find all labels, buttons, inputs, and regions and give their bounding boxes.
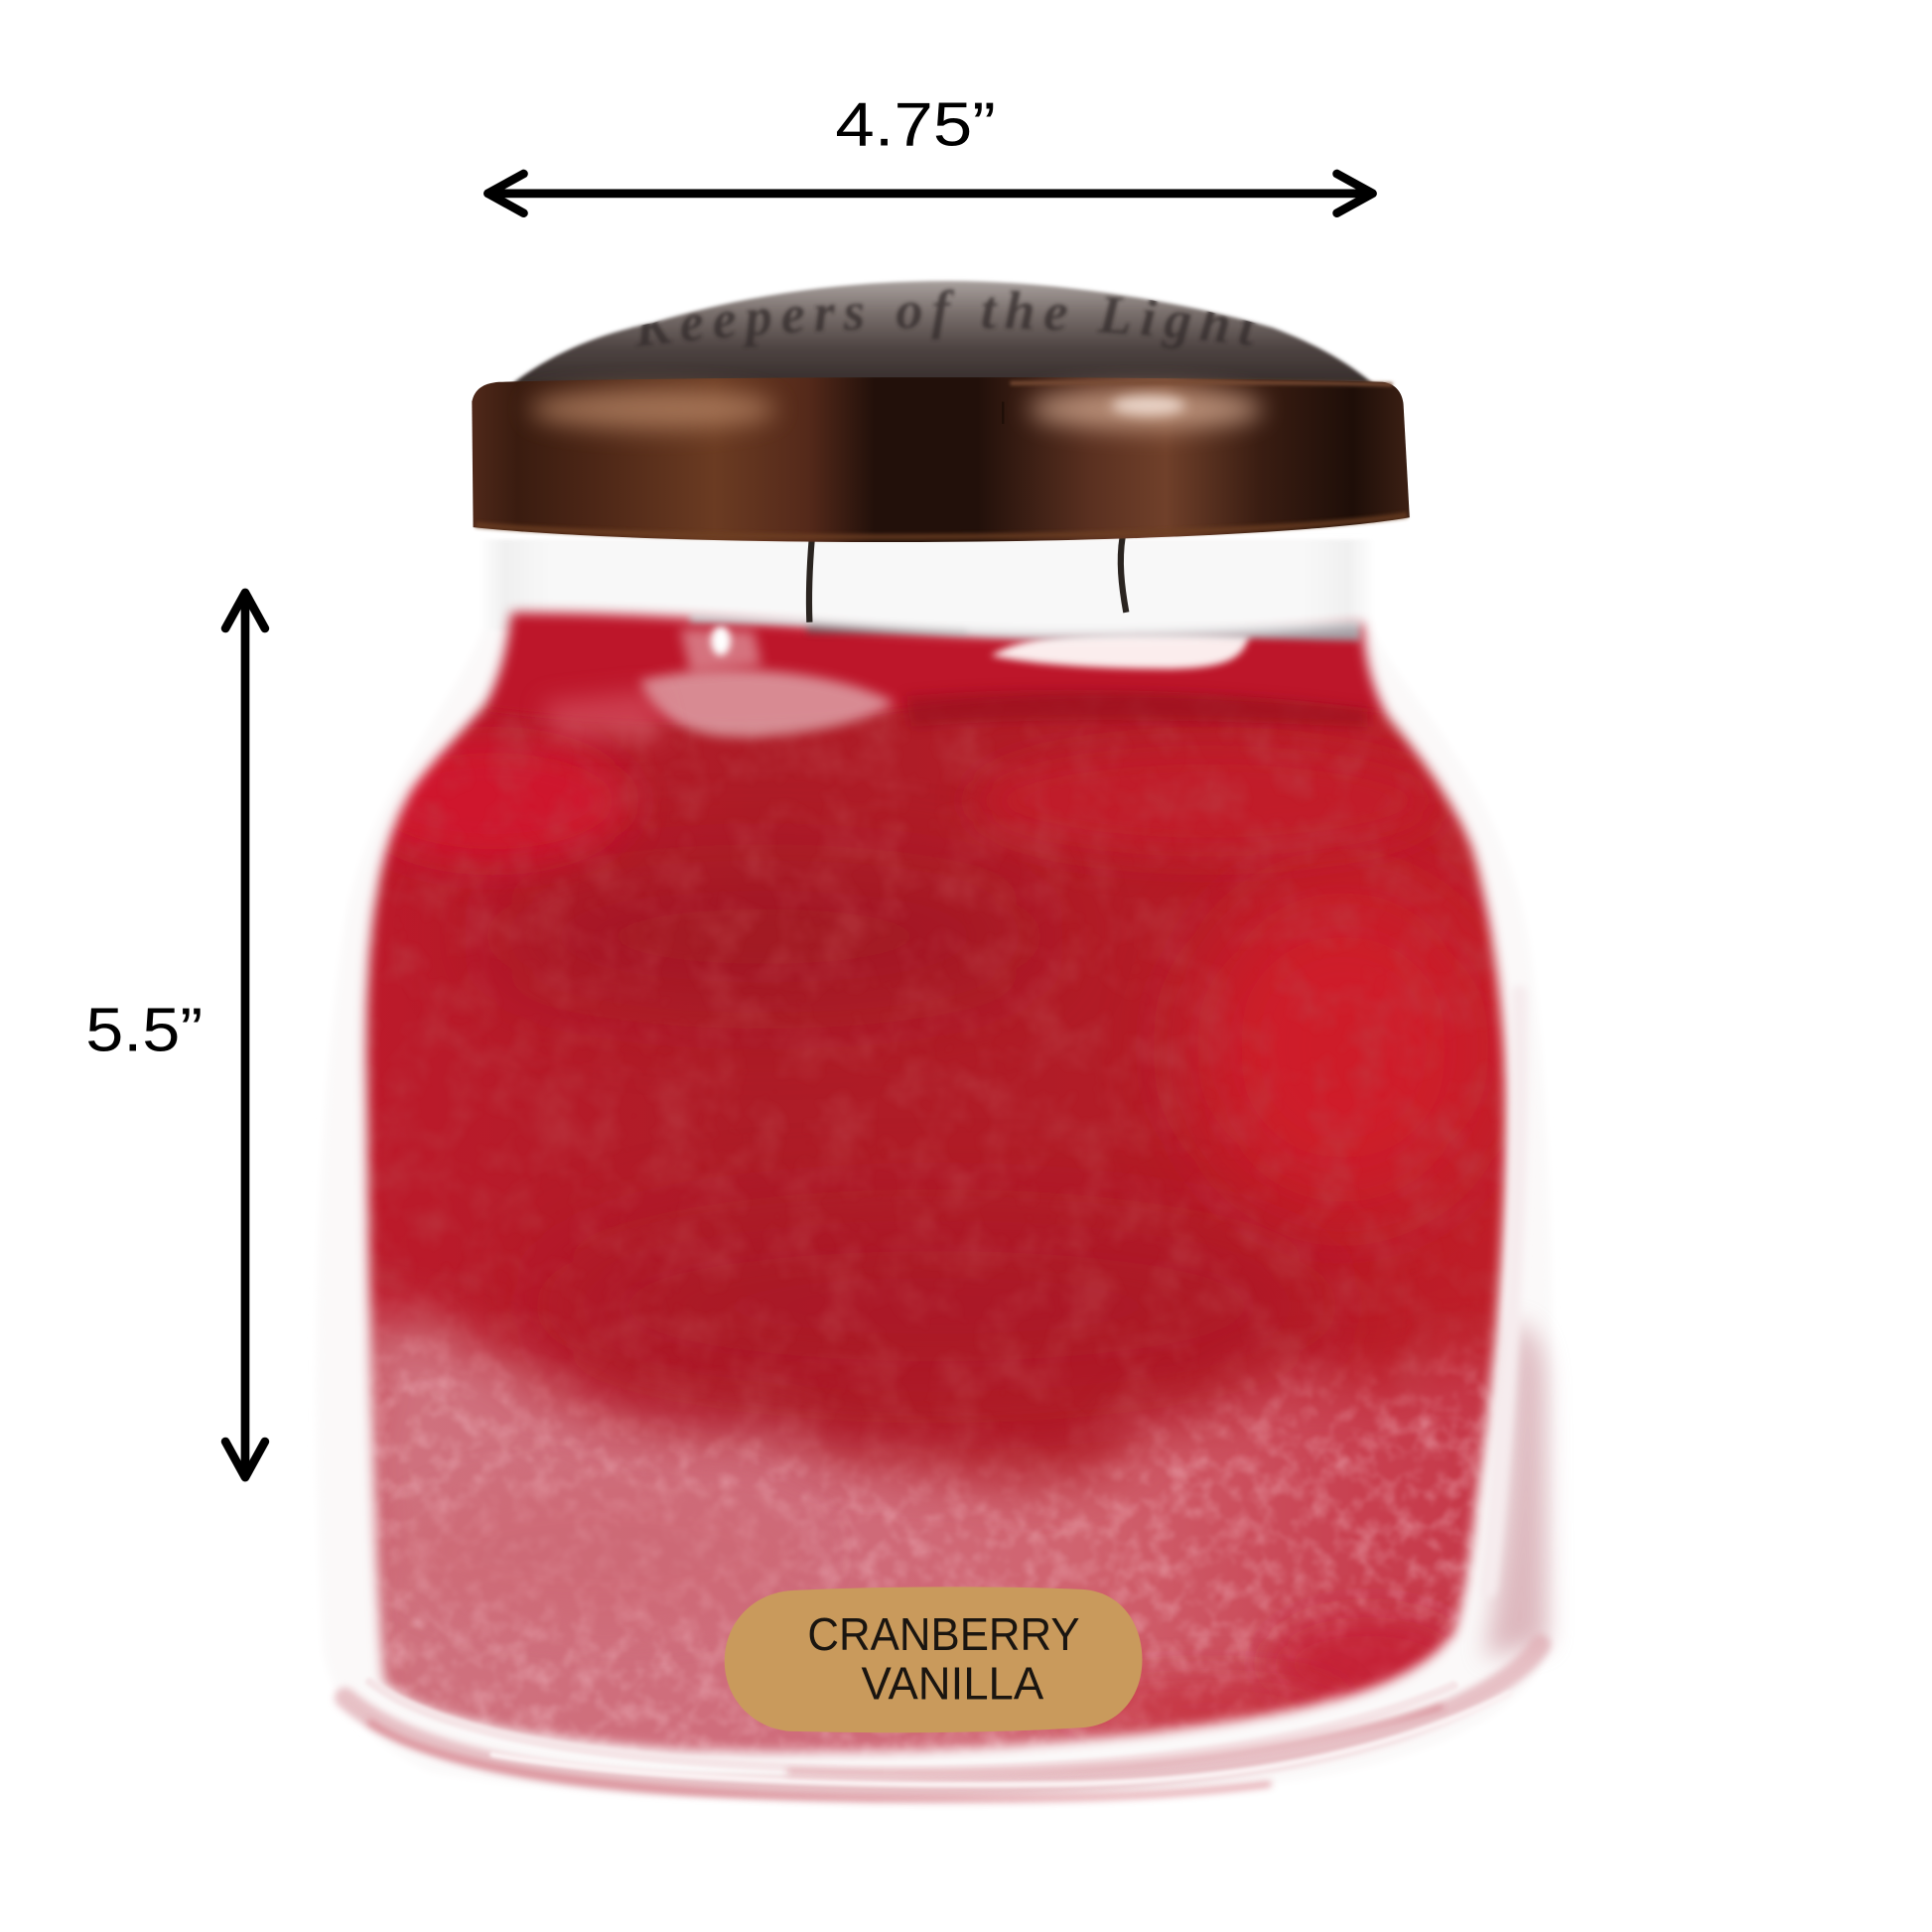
width arrow [487,174,1373,213]
pale lower wax [365,1287,1495,1759]
glass body [317,540,1553,1800]
height arrow [225,593,265,1477]
candle jar [332,278,1561,1807]
label text: VANILLA [862,1657,1044,1709]
lid dome [510,278,1374,381]
label text: CRANBERRY [807,1608,1080,1660]
lid rim [472,377,1410,542]
bottom glass rim [345,1645,1540,1788]
wicks [809,537,1126,622]
red wax [333,592,1540,1787]
wax top shoulder [498,616,1378,721]
height label: 5.5” [85,997,203,1065]
glass highlights [345,993,1540,1800]
width label: 4.75” [835,90,996,159]
lid embossed text: Keepers of the Light [637,287,1258,349]
label [725,1587,1142,1732]
wax melt highlights [640,670,895,737]
right lower glass tint [1484,1318,1548,1657]
infographic: candle jar with dimensions [88,103,1561,1807]
